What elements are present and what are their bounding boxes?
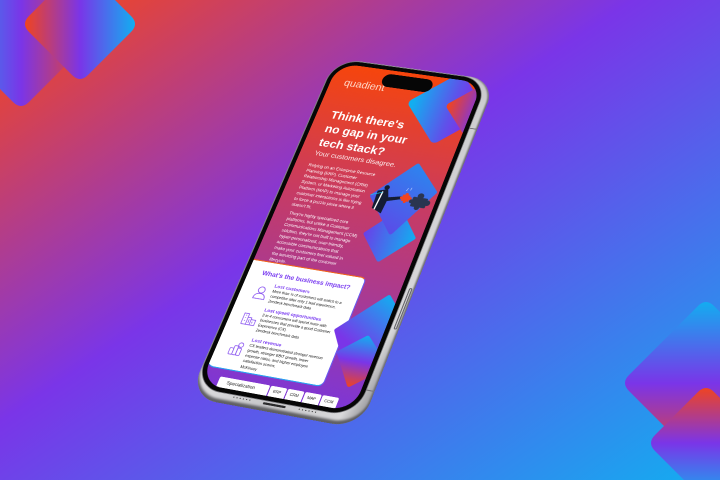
paragraph 1: System, or Marketing Automation — [301, 179, 366, 194]
paragraph 1: to force a puzzle piece where it — [293, 196, 355, 210]
text: lost upsell: Experience (CX). — [257, 323, 288, 332]
text: lost revenue: McKinsey — [240, 365, 258, 372]
column: CRM — [282, 389, 304, 406]
paragraph 2: lifecycle. — [268, 256, 287, 264]
title: Think there's — [329, 109, 406, 132]
side button — [393, 288, 413, 330]
paragraph 1: Relying on an Enterprise Resource — [308, 162, 376, 177]
text: lost customers: Zendesk benchmark data — [267, 299, 312, 311]
column: MAP: MAP — [306, 396, 316, 401]
text: lost customers: More than ⅓ of customers will switch to a — [272, 289, 343, 305]
text: lost customers — [267, 283, 343, 311]
paragraph 2: make your customers feel valued in — [273, 245, 344, 261]
phone mockup — [198, 61, 489, 424]
paragraph 2: They're highly specialized core — [288, 210, 349, 224]
text: lost revenue: growth, stronger EBIT growth, lower — [247, 348, 309, 363]
phone metal frame — [188, 57, 497, 428]
diamond: top red — [445, 84, 502, 134]
illustration: puzzle image — [370, 164, 438, 234]
speaker holes right — [298, 409, 318, 413]
paragraph 1: doesn't fit. — [291, 202, 312, 209]
logo: quadient — [342, 78, 386, 94]
diamond: top-left back — [0, 0, 91, 106]
label: specialization: Specialization — [226, 380, 256, 390]
text: lost revenue: expense ratios, and higher employee — [244, 354, 309, 369]
comparison table header — [216, 376, 339, 408]
title: no gap in your — [323, 123, 409, 147]
paragraph 1: customer interactions is like trying — [296, 190, 363, 205]
column: ERP: ERP — [272, 389, 282, 395]
diamond: lower red — [336, 336, 378, 387]
text: lost upsell: businesses that provide a good Customer — [259, 318, 331, 334]
paragraph 1: Planning (ERP), Customer — [305, 168, 358, 180]
icon: dark puzzle piece — [406, 192, 433, 212]
diamond: top blue — [406, 72, 488, 145]
text: lost upsell: Zendesk benchmark data — [255, 329, 299, 340]
antenna band upper — [469, 128, 478, 130]
paragraph 2: solution, they're not built to manage — [281, 227, 351, 243]
heading: What's the business impact? — [261, 270, 351, 292]
antenna band lower — [365, 389, 375, 392]
column: CCM — [317, 395, 339, 413]
text: lost revenue: Lost revenue — [251, 337, 282, 348]
text: lost revenue — [240, 337, 324, 372]
charging port — [262, 402, 286, 409]
panel: business impact — [207, 259, 367, 387]
text: lost upsell — [255, 307, 331, 340]
paragraph 2: hyper-personalized, user-friendly, — [278, 233, 345, 249]
text: lost customers: Lost customers — [274, 283, 311, 294]
diamond: bottom-right small — [651, 388, 720, 480]
diamond: bottom-right large — [625, 302, 720, 464]
title — [317, 109, 409, 158]
paragraph 2: the servicing part of the customer — [271, 251, 338, 266]
column: CCM: CCM — [323, 399, 334, 405]
column: MAP — [299, 392, 322, 409]
diamond: lower blue behind image — [363, 220, 416, 262]
icon: coins — [228, 342, 244, 356]
text: lost upsell: 3 in 4 consumers will spend more with — [262, 313, 327, 328]
paragraph 1 — [291, 162, 376, 210]
text: lost revenue: CX leaders demonstrated stronger revenue — [249, 343, 324, 360]
diamond: lower blue — [334, 295, 396, 350]
text: lost upsell: Lost upsell opportunities — [264, 307, 322, 322]
image backdrop — [359, 161, 444, 237]
dynamic island — [379, 73, 434, 93]
icon: spark marks — [406, 187, 412, 192]
icon: buildings — [240, 312, 256, 326]
icon: person — [252, 286, 266, 300]
diamond: top-left front — [25, 0, 135, 79]
text: lost customers: competitor after only 1 bad experience. — [269, 294, 337, 309]
column: ERP — [265, 386, 287, 403]
subtitle: Your customers disagree. — [313, 150, 397, 169]
paragraph 2: Communications Management (CCM) — [283, 222, 358, 238]
phone black bezel — [194, 59, 488, 417]
icon: red puzzle piece — [398, 192, 414, 204]
title: tech stack? — [317, 136, 387, 158]
label: specialization — [214, 376, 270, 400]
paragraph 2: accessible communications that — [276, 239, 339, 254]
column: CRM: CRM — [289, 392, 299, 398]
screen — [200, 63, 482, 412]
icon: running figure — [364, 183, 405, 216]
text: lost revenue: satisfaction scores. — [242, 359, 276, 369]
paragraph 2: platforms, but unlike a Customer — [286, 216, 350, 231]
speaker holes left — [233, 397, 250, 401]
paragraph 1: Platform (MAP) to manage your — [298, 185, 361, 199]
paragraph 2 — [268, 210, 358, 266]
paragraph 1: Relationship Management (CRM) — [303, 173, 369, 188]
